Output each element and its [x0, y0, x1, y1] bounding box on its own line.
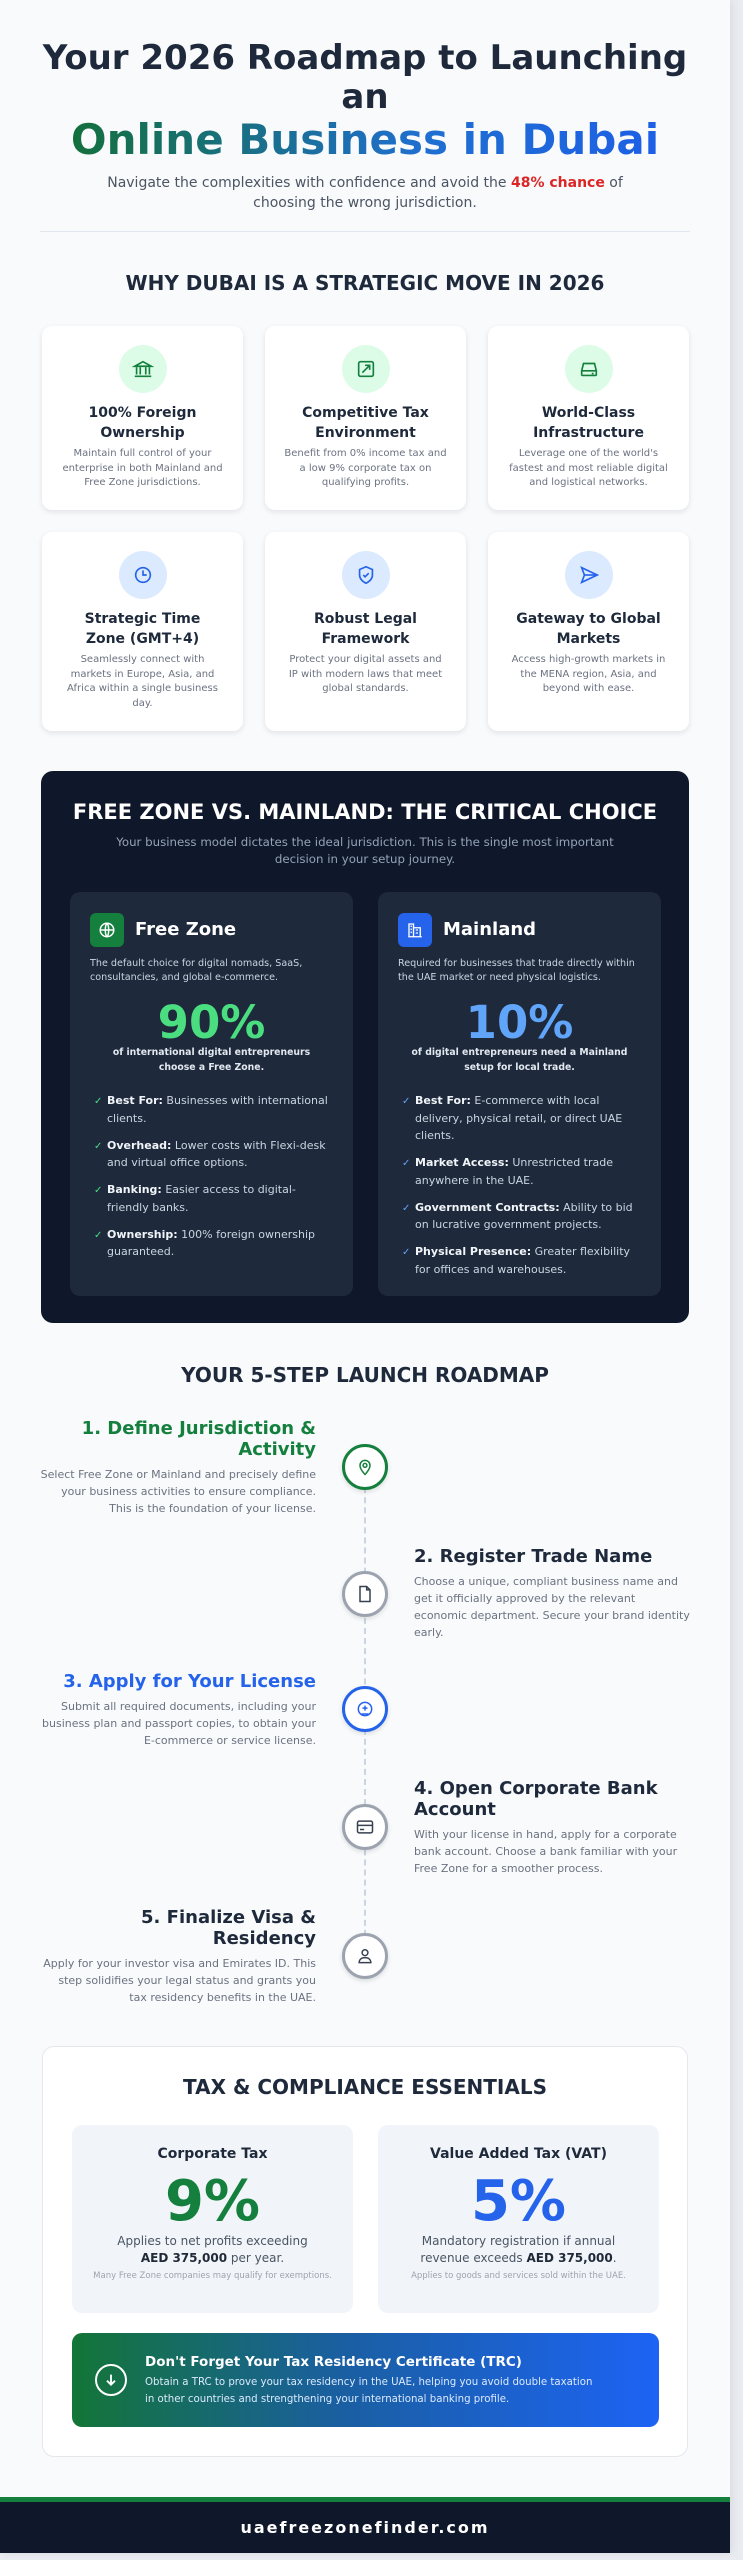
vat: Value Added Tax (VAT) [430, 2146, 607, 2162]
icon: location [342, 1444, 388, 1490]
step 5: Residency [213, 1928, 316, 1948]
title [42, 38, 687, 164]
step 1: This is the foundation of your license. [109, 1502, 316, 1514]
step 4: 4. Open Corporate Bank [414, 1778, 658, 1798]
card: foreign ownership: Maintain full control of your enterprise in both Mainland and Free Zone jurisdictions. [62, 448, 223, 488]
list: ✓ [94, 1230, 102, 1240]
step 3: 3. Apply for Your License [63, 1670, 316, 1692]
card: foreign ownership: 100% Foreign Ownership [89, 405, 196, 441]
step 5 [43, 1906, 316, 2004]
step 2: Choose a unique, compliant business name and [414, 1574, 678, 1588]
list: ✓ [402, 1247, 410, 1258]
icon: card [342, 1804, 388, 1850]
step 5: step solidifies your legal status and grants you [58, 1974, 316, 1986]
card: time zone: Seamlessly connect with markets in Europe, Asia, and Africa within a single business day. [67, 654, 218, 708]
title: Your 2026 Roadmap to Launching [43, 38, 687, 78]
step 4: Account [414, 1798, 496, 1820]
list: Overhead: Lower costs with Flexi-desk and virtual office options. [107, 1138, 326, 1169]
step 5: tax residency benefits in the UAE. [129, 1990, 316, 2004]
heading: roadmap: YOUR 5-STEP LAUNCH ROADMAP [181, 1363, 549, 1387]
panel: mainland: setup for local trade. [464, 1062, 575, 1072]
step 3 [42, 1670, 316, 1746]
intro text: Your business model dictates the ideal jurisdiction. This is the single most important decision in your setup journey. [116, 835, 614, 866]
heading: why dubai: WHY DUBAI IS A STRATEGIC MOVE IN 2026 [126, 271, 604, 295]
step 1: Activity [238, 1438, 316, 1460]
stat: 10%: 10% [466, 996, 573, 1049]
step 4: bank account. Choose a bank familiar with your [414, 1844, 677, 1858]
step 4 [414, 1778, 678, 1874]
card: legal: Protect your digital assets and IP with modern laws that meet global standards. [289, 654, 442, 694]
list: Physical Presence: Greater flexibility for offices and warehouses. [415, 1245, 630, 1276]
heading: TAX & COMPLIANCE ESSENTIALS [183, 2075, 547, 2099]
step 2: economic department. Secure your brand identity [414, 1608, 690, 1622]
card: gateway [488, 532, 689, 731]
list: ✓ [402, 1202, 410, 1214]
list: ✓ [94, 1140, 102, 1152]
list: friendly banks. [107, 1200, 189, 1214]
step 2 [414, 1546, 690, 1638]
card: legal: Robust Legal Framework [314, 611, 417, 647]
panel: tax & compliance [42, 2046, 688, 2457]
list: Government Contracts: Ability to bid on lucrative government projects. [415, 1200, 633, 1231]
list: ✓ [94, 1096, 102, 1107]
icon: download circle [95, 2364, 127, 2396]
step 1 [41, 1418, 316, 1514]
icon: globe [90, 913, 124, 947]
footer: uaefreezonefinder.com [240, 2518, 490, 2537]
panel: free zone: The default choice for digital nomads, SaaS, consultancies, and global e-commerce. [90, 958, 302, 983]
step 1: 1. Define Jurisdiction & [82, 1418, 316, 1438]
icon: person [342, 1933, 388, 1979]
list: ✓ [402, 1096, 410, 1107]
card: tax: Benefit from 0% income tax and a low 9% corporate tax on qualifying profits. [284, 448, 447, 488]
list [94, 1094, 328, 1258]
step 4: Free Zone for a smoother process. [414, 1862, 603, 1874]
list: Market Access: Unrestricted trade anywhere in the UAE. [415, 1156, 613, 1186]
vat [378, 2125, 659, 2313]
vat: Mandatory registration if annual [422, 2234, 615, 2248]
list: Banking: Easier access to digital- [107, 1183, 296, 1196]
callout: TRC: Obtain a TRC to prove your tax residency in the UAE, helping you avoid double taxation [145, 2376, 592, 2388]
step 3: business plan and passport copies, to obtain your [42, 1716, 316, 1730]
card: foreign ownership [42, 326, 243, 510]
corporate tax: AED 375,000 per year. [141, 2251, 284, 2265]
step 5: 5. Finalize Visa & [141, 1906, 316, 1928]
icon: license [342, 1686, 388, 1732]
heading: FREE ZONE VS. MAINLAND: THE CRITICAL CHOICE [73, 800, 657, 824]
step 1: your business activities to ensure compliance. [61, 1484, 316, 1498]
card: gateway: Access high-growth markets in the MENA region, Asia, and beyond with ease. [512, 654, 665, 694]
title: Online Business in Dubai [71, 115, 659, 164]
corporate tax: Applies to net profits exceeding [117, 2234, 308, 2248]
card: gateway: Gateway to Global Markets [516, 611, 661, 647]
list [402, 1094, 633, 1276]
panel: free zone: Free Zone [135, 919, 236, 940]
title: an [341, 77, 389, 117]
step 5: Apply for your investor visa and Emirates ID. This [43, 1956, 316, 1970]
step 2: get it officially approved by the relevant [414, 1592, 635, 1604]
list: ✓ [402, 1158, 410, 1169]
vat: 5% [471, 2169, 566, 2234]
panel: mainland [378, 892, 661, 1296]
card: infrastructure: World-Class Infrastructure [533, 405, 644, 441]
card: time zone: Strategic Time [85, 611, 200, 627]
stat: 90%: 90% [158, 996, 265, 1049]
list: Best For: Businesses with international clients. [107, 1094, 328, 1124]
step 2: early. [414, 1626, 444, 1638]
callout: TRC [72, 2333, 659, 2427]
card: tax: Competitive Tax Environment [302, 405, 429, 441]
corporate tax: 9% [165, 2169, 260, 2234]
footer [0, 2497, 730, 2553]
step 1: Select Free Zone or Mainland and precisely define [41, 1468, 316, 1480]
card: time zone: Zone (GMT+4) [86, 631, 199, 647]
list: ✓ [94, 1185, 102, 1196]
icon: building [398, 913, 432, 947]
step 3: Submit all required documents, including your [61, 1700, 316, 1712]
panel: mainland: Mainland [443, 919, 536, 940]
panel: free zone: of international digital entrepreneurs choose a Free Zone. [113, 1046, 310, 1072]
vat: Applies to goods and services sold within the UAE. [411, 2271, 626, 2281]
list: Ownership: 100% foreign ownership guaranteed. [107, 1228, 315, 1258]
card: time zone [42, 532, 243, 731]
panel: mainland: Required for businesses that trade directly within the UAE market or need physical logistics. [398, 958, 635, 983]
list: Best For: E-commerce with local delivery, physical retail, or direct UAE clients. [415, 1094, 622, 1142]
step 4: With your license in hand, apply for a corporate [414, 1828, 677, 1840]
callout: TRC: in other countries and strengthening your international banking profile. [145, 2394, 509, 2404]
callout: TRC: Don't Forget Your Tax Residency Certificate (TRC) [145, 2354, 522, 2370]
card: infrastructure [488, 326, 689, 510]
subtitle: Navigate the complexities with confidence and avoid the 48% chance of choosing the wrong jurisdiction. [107, 175, 623, 211]
panel: free zone [70, 892, 353, 1296]
panel: free zone vs mainland [41, 771, 689, 1323]
card: legal [265, 532, 466, 731]
step 3: E-commerce or service license. [144, 1734, 316, 1746]
icon: document [342, 1571, 388, 1617]
panel: mainland: of digital entrepreneurs need a Mainland [412, 1046, 627, 1058]
card: infrastructure: Leverage one of the world's fastest and most reliable digital and logistical networks. [509, 448, 668, 488]
card: tax [265, 326, 466, 510]
vat: revenue exceeds AED 375,000. [420, 2251, 617, 2265]
corporate tax: Corporate Tax [157, 2146, 268, 2162]
corporate tax [72, 2125, 353, 2313]
step 2: 2. Register Trade Name [414, 1546, 652, 1566]
corporate tax: Many Free Zone companies may qualify for exemptions. [93, 2271, 332, 2281]
